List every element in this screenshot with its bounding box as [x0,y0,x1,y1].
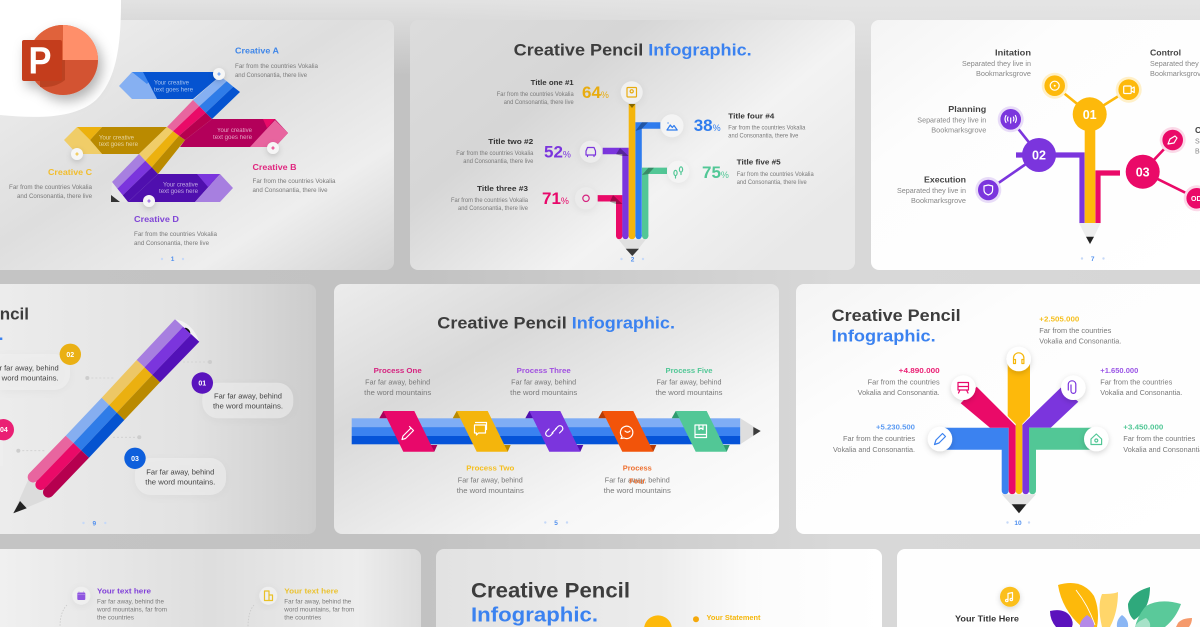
yellow node [644,615,672,627]
stat: title five 75%: 75% [702,163,729,182]
icon: mountains [660,114,684,137]
callout: 01: the word mountains. [213,404,283,410]
ribbon captions: text goes here [159,189,199,195]
stat: +1.650.000: Vokalia and Consonantia. [1100,390,1182,397]
dotted leaders [16,360,212,453]
stat: title four 38%: Far from the countries Vokalia [728,126,806,132]
page number [620,256,644,264]
stat: title one 64%: Far from the countries Vokalia [497,92,574,98]
text: creative C: Creative C [48,167,92,177]
callout: 03: the word mountains. [145,480,215,486]
icon: paperclip [1061,375,1086,400]
page number [544,520,568,527]
ribbon: pink [180,119,288,147]
text: creative A [235,46,318,79]
text: creative A: and Consonantia, there live [235,72,307,79]
node: 03 [1126,155,1160,189]
icon: footprints [667,161,689,183]
stat: title one 64%: and Consonantia, there live [504,100,574,106]
stat: +4.890.000: Vokalia and Consonantia. [858,390,940,397]
ribbon captions: text goes here [154,88,194,94]
ribbon captions: text goes here [213,135,253,141]
callout: 02 [0,344,81,390]
text: creative B: Creative B [252,162,296,172]
page number: 2 [631,256,635,264]
ribbon captions [99,80,253,195]
ribbon: blue [119,72,220,99]
page number: 10 [1014,520,1022,527]
statement label: Your Statement [706,615,761,622]
icon: signal [998,106,1024,132]
panel: slide bottom left text items [0,549,421,627]
text: process five: the word mountains [656,390,723,397]
text: process four: Four [629,476,645,486]
ribbon: purple [128,174,233,202]
icon: headphones [1006,347,1031,371]
panel: slide bottom right tree [897,549,1200,627]
text: creative B: Far from the countries Vokalia [252,178,336,185]
text: process three: Process Three [517,366,571,375]
text: creative A: Creative A [235,46,279,56]
title: Infographic. [471,604,598,626]
ribbon captions: Your creative [217,128,253,134]
stat: +5.230.500: Far from the countries [843,436,916,443]
stat: title five 75%: Far from the countries Vokalia [737,172,814,178]
text: creative A: Far from the countries Vokalia [235,63,318,70]
panel: slide 2 pencil percentages [410,20,855,270]
ribbon: yellow [64,127,167,154]
text: process one: the word mountains [364,390,432,397]
ribbon: orange [598,411,656,452]
callout: 02: 02 [66,352,74,359]
stat: title two 52%: and Consonantia, there live [463,159,534,165]
page number: 9 [92,520,96,528]
stat: title four 38%: Title four #4 [728,112,775,120]
stat: +1.650.000: Far from the countries [1100,379,1173,386]
ribbon: purple [525,411,583,452]
text: process three [510,366,578,397]
text: process two: Far far away, behind [458,478,523,484]
stat: +2.505.000: Far from the countries [1039,328,1112,335]
stat: +3.450.000: Far from the countries [1123,436,1196,443]
text: process two: Process Two [466,464,515,473]
stat: title three 71%: 71% [542,189,569,208]
text: your text here yellow: Far far away, behind the [284,599,352,605]
text: your title here: Your Title Here [955,614,1019,624]
icon: building [259,587,277,605]
text: initation: Initation [995,48,1031,58]
branching pencil [943,360,1092,513]
text: execution: Execution [924,174,966,184]
text: initation [962,48,1031,78]
stat: title two 52%: Far from the countries Vokalia [456,151,534,157]
leaves [1050,583,1192,627]
ribbon captions: text goes here [99,142,139,148]
text: execution: Bookmarksgrove [911,198,966,205]
text: creative C: Far from the countries Vokalia [9,184,92,191]
page number: 5 [554,520,558,527]
icon: car [580,141,602,163]
text: process four: Process [623,464,652,473]
stat: +2.505.000: Vokalia and Consonantia. [1039,339,1121,346]
dotted arcs [60,605,254,627]
panel: slide 1 creative A to D [0,20,394,270]
text: process four: Far far away, behind [605,478,670,484]
callout: 03: 03 [131,456,139,463]
diagonal z pencil [111,76,240,202]
text: process two [457,464,524,495]
callout: 03: Far far away, behind [146,470,214,476]
stat: +2.505.000: +2.505.000 [1039,315,1079,324]
callout: 01 [192,372,293,418]
text: process one: Process One [374,366,422,375]
title: Creative Pencil [471,580,630,602]
title [832,306,961,346]
stat: title five 75%: and Consonantia, there live [737,180,807,186]
text: process three: Far far away, behind [511,380,576,386]
text: process five [656,366,723,397]
text: creative D: Far from the countries Vokalia [134,231,217,238]
callout: 04 [0,419,14,466]
ribbon: green [672,411,730,452]
text: your text here purple [96,587,167,621]
diagonal pencil [13,319,199,513]
stat: +5.230.500 [833,423,916,454]
stat: +4.890.000 [858,366,940,397]
text: execution: Separated they live in [897,188,966,195]
text: execution [897,174,966,205]
page number [1081,256,1105,263]
stat: +5.230.500: Vokalia and Consonantia. [833,447,915,454]
stat: title one 64%: 64% [582,83,609,102]
stat: title four 38% [694,112,806,140]
stat: title four 38%: and Consonantia, there live [728,134,799,140]
stat: title three 71%: Far from the countries Vokalia [451,198,529,204]
badge: powerpoint [0,0,121,117]
text: control: Control [1150,48,1181,58]
stat: +1.650.000 [1100,366,1182,397]
text: creative C [9,167,92,200]
title: Infographic. [832,326,936,346]
node: 01 [1073,97,1107,131]
text: planning: Planning [948,104,986,114]
stat: +5.230.500: +5.230.500 [876,423,915,432]
text: process one [364,366,432,397]
callout: 03 [124,448,226,495]
text: process two: the word mountains [457,488,524,495]
text: your text here yellow [283,587,354,621]
stat: title one 64%: Title one #1 [531,78,574,87]
icon: house [1084,427,1109,451]
icon: music note [1000,587,1020,607]
text: creative D [134,214,217,247]
pencil tree [988,86,1197,245]
icon: video camera [1116,77,1142,103]
stat: title two 52% [456,137,571,165]
node: 03: 03 [1136,165,1150,179]
panel: slide 7 tree pencil [871,20,1200,270]
text: process five: Process Five [666,366,712,375]
page number [1006,520,1030,527]
stat: +1.650.000: +1.650.000 [1100,366,1138,375]
text: planning [917,104,986,134]
text: creative B [252,162,336,194]
panel: slide 9 diagonal pencil [0,284,316,534]
icon: calendar [72,587,90,605]
text: initation: Separated they live in [962,61,1031,68]
title: Creative Pencil Infographic. [514,40,752,60]
text: initation: Bookmarksgrove [976,71,1031,78]
text: your text here purple: the countries [97,615,134,621]
text: planning: Separated they live in [917,118,986,124]
icon: monitor [951,375,976,400]
text: your text here purple: Far far away, behind the [97,599,165,605]
text: creative D: and Consonantia, there live [134,240,209,247]
icon: tape [1184,185,1200,211]
stat: title three 71% [451,184,569,212]
text: your text here purple: word mountains, far from [96,607,167,613]
text: process four: the word mountains [604,488,671,495]
stat: title two 52%: 52% [544,142,571,161]
icon: pen [1160,127,1186,153]
icon: book [621,81,643,103]
text: your text here yellow: Your text here [284,587,338,596]
title [0,304,29,344]
stat: +3.450.000 [1123,423,1200,454]
node: 02: 02 [1032,148,1046,162]
text: your text here yellow: word mountains, far from [283,607,354,613]
text: process five: Far far away, behind [656,380,722,386]
page number [161,256,184,263]
ribbon captions: Your creative [163,182,199,188]
node: 01: 01 [1083,108,1097,122]
ribbon: yellow [453,411,511,452]
text: creative D: Creative D [134,214,179,224]
title: Creative Pencil [832,306,961,325]
panel: slide 5 horizontal pencil [334,284,779,534]
text: creative B: and Consonantia, there live [252,187,328,194]
stat: +3.450.000: +3.450.000 [1123,423,1163,432]
stat: +4.890.000: +4.890.000 [899,366,940,375]
stat: title two 52%: Title two #2 [488,137,533,146]
text: your text here purple: Your text here [97,587,151,596]
text: planning: Bookmarksgrove [931,128,986,134]
page number: 7 [1091,256,1095,263]
stat: title five 75%: Title five #5 [737,158,781,167]
stat: title one 64% [497,78,609,106]
icon: shield [975,177,1001,203]
title [471,580,630,626]
callout: 01: 01 [198,380,206,388]
stat: +2.505.000 [1039,315,1121,346]
stat: title three 71%: and Consonantia, there live [458,206,529,212]
stat: title three 71%: Title three #3 [477,184,528,193]
text: process three: the word mountains [510,390,578,397]
page number [82,520,107,528]
plus markers [71,68,279,207]
text: control [1150,48,1200,78]
text: process four [604,464,671,495]
node: 02 [1022,138,1056,172]
icon: pencil [928,427,952,451]
title: Creative Pencil Infographic. [437,314,675,332]
stat: title five 75% [702,158,814,186]
text: your text here yellow: the countries [284,615,321,621]
pencil stems [598,104,667,257]
ribbon: pink [379,411,437,452]
panel: slide bottom centre title [436,549,882,627]
panel: slide 10 branching pencil [796,284,1200,534]
stat: +4.890.000: Far from the countries [868,379,940,386]
page number: 1 [171,256,175,263]
icon: flower [575,187,597,209]
callout: 04: 04 [0,427,8,434]
callout: 01: Far far away, behind [214,394,282,400]
icon: powerpoint logo: P [28,40,52,82]
ribbon captions: Your creative [99,136,135,142]
stat: title four 38%: 38% [694,116,721,135]
ribbon captions: Your creative [154,80,190,86]
text: process one: Far far away, behind [365,380,430,386]
icon: compass [1042,73,1068,99]
text: creative C: and Consonantia, there live [17,193,92,200]
text: creation [1195,125,1200,156]
horizontal pencil [352,418,761,444]
